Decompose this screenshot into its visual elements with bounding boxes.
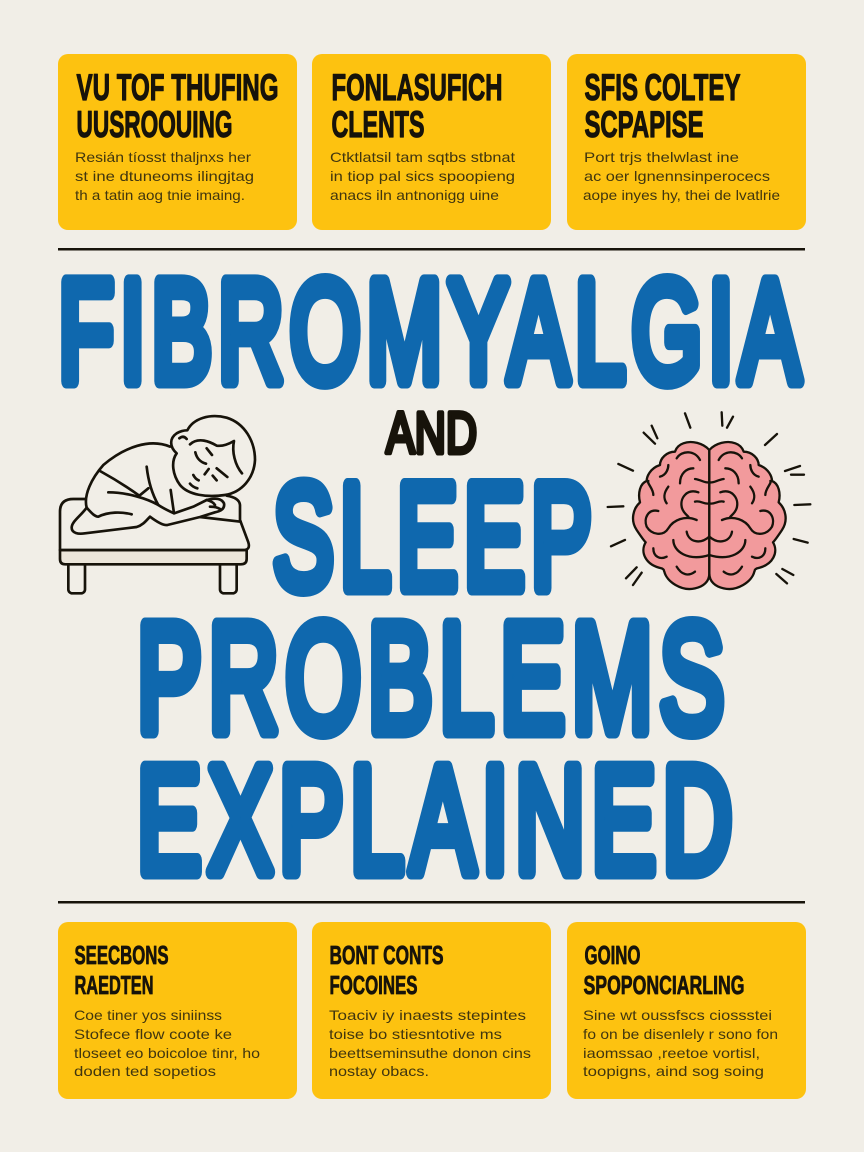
bottom card 2 body text: Toaciv iy inaests stepintes bbox=[329, 1007, 526, 1023]
bottom card 2 body text: toise bo stiesntotive ms bbox=[329, 1026, 502, 1042]
panel: bottom card 3 bbox=[567, 922, 806, 1099]
panel: top card 1 bbox=[58, 54, 297, 230]
card 2 heading: CLENTS bbox=[332, 104, 424, 145]
card 1 body text bbox=[75, 149, 254, 203]
bottom card 1 heading: RAEDTEN bbox=[74, 970, 154, 1000]
bottom card 3 heading bbox=[584, 940, 744, 1000]
card 2 body text: Ctktlatsil tam sqtbs stbnat bbox=[330, 149, 515, 165]
panel: bottom card 2 bbox=[312, 922, 551, 1099]
card 2 heading bbox=[332, 67, 502, 145]
panel: bottom card 1 bbox=[58, 922, 297, 1099]
bottom card 1 body text: tloseet eo boicoloe tinr, ho bbox=[74, 1045, 260, 1061]
bottom card 3 body text: iaomssao ,reetoe vortisl, bbox=[583, 1045, 760, 1061]
bottom card 3 body text: toopigns, aind sog soing bbox=[583, 1063, 764, 1079]
bottom card 2 heading bbox=[330, 940, 444, 1000]
bottom card 2 body text bbox=[329, 1007, 531, 1079]
right hemisphere bbox=[709, 442, 786, 589]
card 1 heading: VU TOF THUFING bbox=[76, 67, 278, 108]
card 1 heading: UUSROOUING bbox=[76, 104, 232, 145]
icon: person sleeping on a bench bbox=[60, 416, 255, 593]
left hemisphere bbox=[633, 442, 709, 589]
bottom card 3 body text: fo on be disenlely r sono fon bbox=[583, 1026, 778, 1042]
panel: top card 2 bbox=[312, 54, 551, 230]
card 1 body text: st ine dtuneoms ilingjtag bbox=[75, 168, 254, 184]
bottom card 3 body text: Sine wt oussfscs ciossstei bbox=[583, 1007, 772, 1023]
card 1 heading bbox=[76, 67, 278, 145]
title line: and: AND bbox=[386, 401, 477, 466]
icon: brain with radiating lines bbox=[608, 412, 810, 589]
bottom card 2 heading: FOCOINES bbox=[330, 970, 418, 1000]
card 2 body text: in tiop pal sics spoopieng bbox=[330, 168, 515, 184]
card 3 heading: SFIS COLTEY bbox=[584, 67, 741, 108]
bottom card 3 heading: SPOPONCIARLING bbox=[584, 970, 744, 1000]
bottom card 3 body text bbox=[583, 1007, 778, 1079]
card 3 heading bbox=[584, 67, 741, 145]
bottom card 1 body text: Coe tiner yos siniinss bbox=[74, 1007, 222, 1023]
title line: Sleep: SLEEP bbox=[273, 453, 598, 620]
bottom card 1 body text bbox=[74, 1007, 260, 1079]
card 3 body text: aope inyes hy, thei de lvatlrie bbox=[583, 187, 780, 203]
bottom card 1 body text: Stofece flow coote ke bbox=[74, 1026, 232, 1042]
card 2 heading: FONLASUFICH bbox=[332, 67, 502, 108]
bottom card 3 heading: GOINO bbox=[584, 940, 640, 970]
bottom card 2 body text: nostay obacs. bbox=[329, 1063, 429, 1079]
card 3 heading: SCPAPISE bbox=[584, 104, 704, 145]
card 3 body text bbox=[583, 149, 780, 203]
card 2 body text bbox=[330, 149, 515, 203]
bottom card 1 heading bbox=[74, 940, 168, 1000]
radiating lines bbox=[608, 412, 810, 585]
panel: top card 3 bbox=[567, 54, 806, 230]
card 2 body text: anacs iln antnonigg uine bbox=[330, 187, 499, 203]
card 3 body text: Port trjs thelwlast ine bbox=[584, 149, 739, 165]
bottom card 1 heading: SEECBONS bbox=[74, 940, 168, 970]
bottom card 2 heading: BONT CONTS bbox=[330, 940, 444, 970]
card 1 body text: Resián tíosst thaljnxs her bbox=[75, 149, 251, 165]
card 3 body text: ac oer lgnennsinperocecs bbox=[584, 168, 770, 184]
title bbox=[58, 251, 806, 904]
bottom card 1 body text: doden ted sopetios bbox=[74, 1063, 216, 1079]
card 1 body text: th a tatin aog tnie imaing. bbox=[75, 187, 245, 203]
bottom card 2 body text: beettseminsuthe donon cins bbox=[329, 1045, 531, 1061]
